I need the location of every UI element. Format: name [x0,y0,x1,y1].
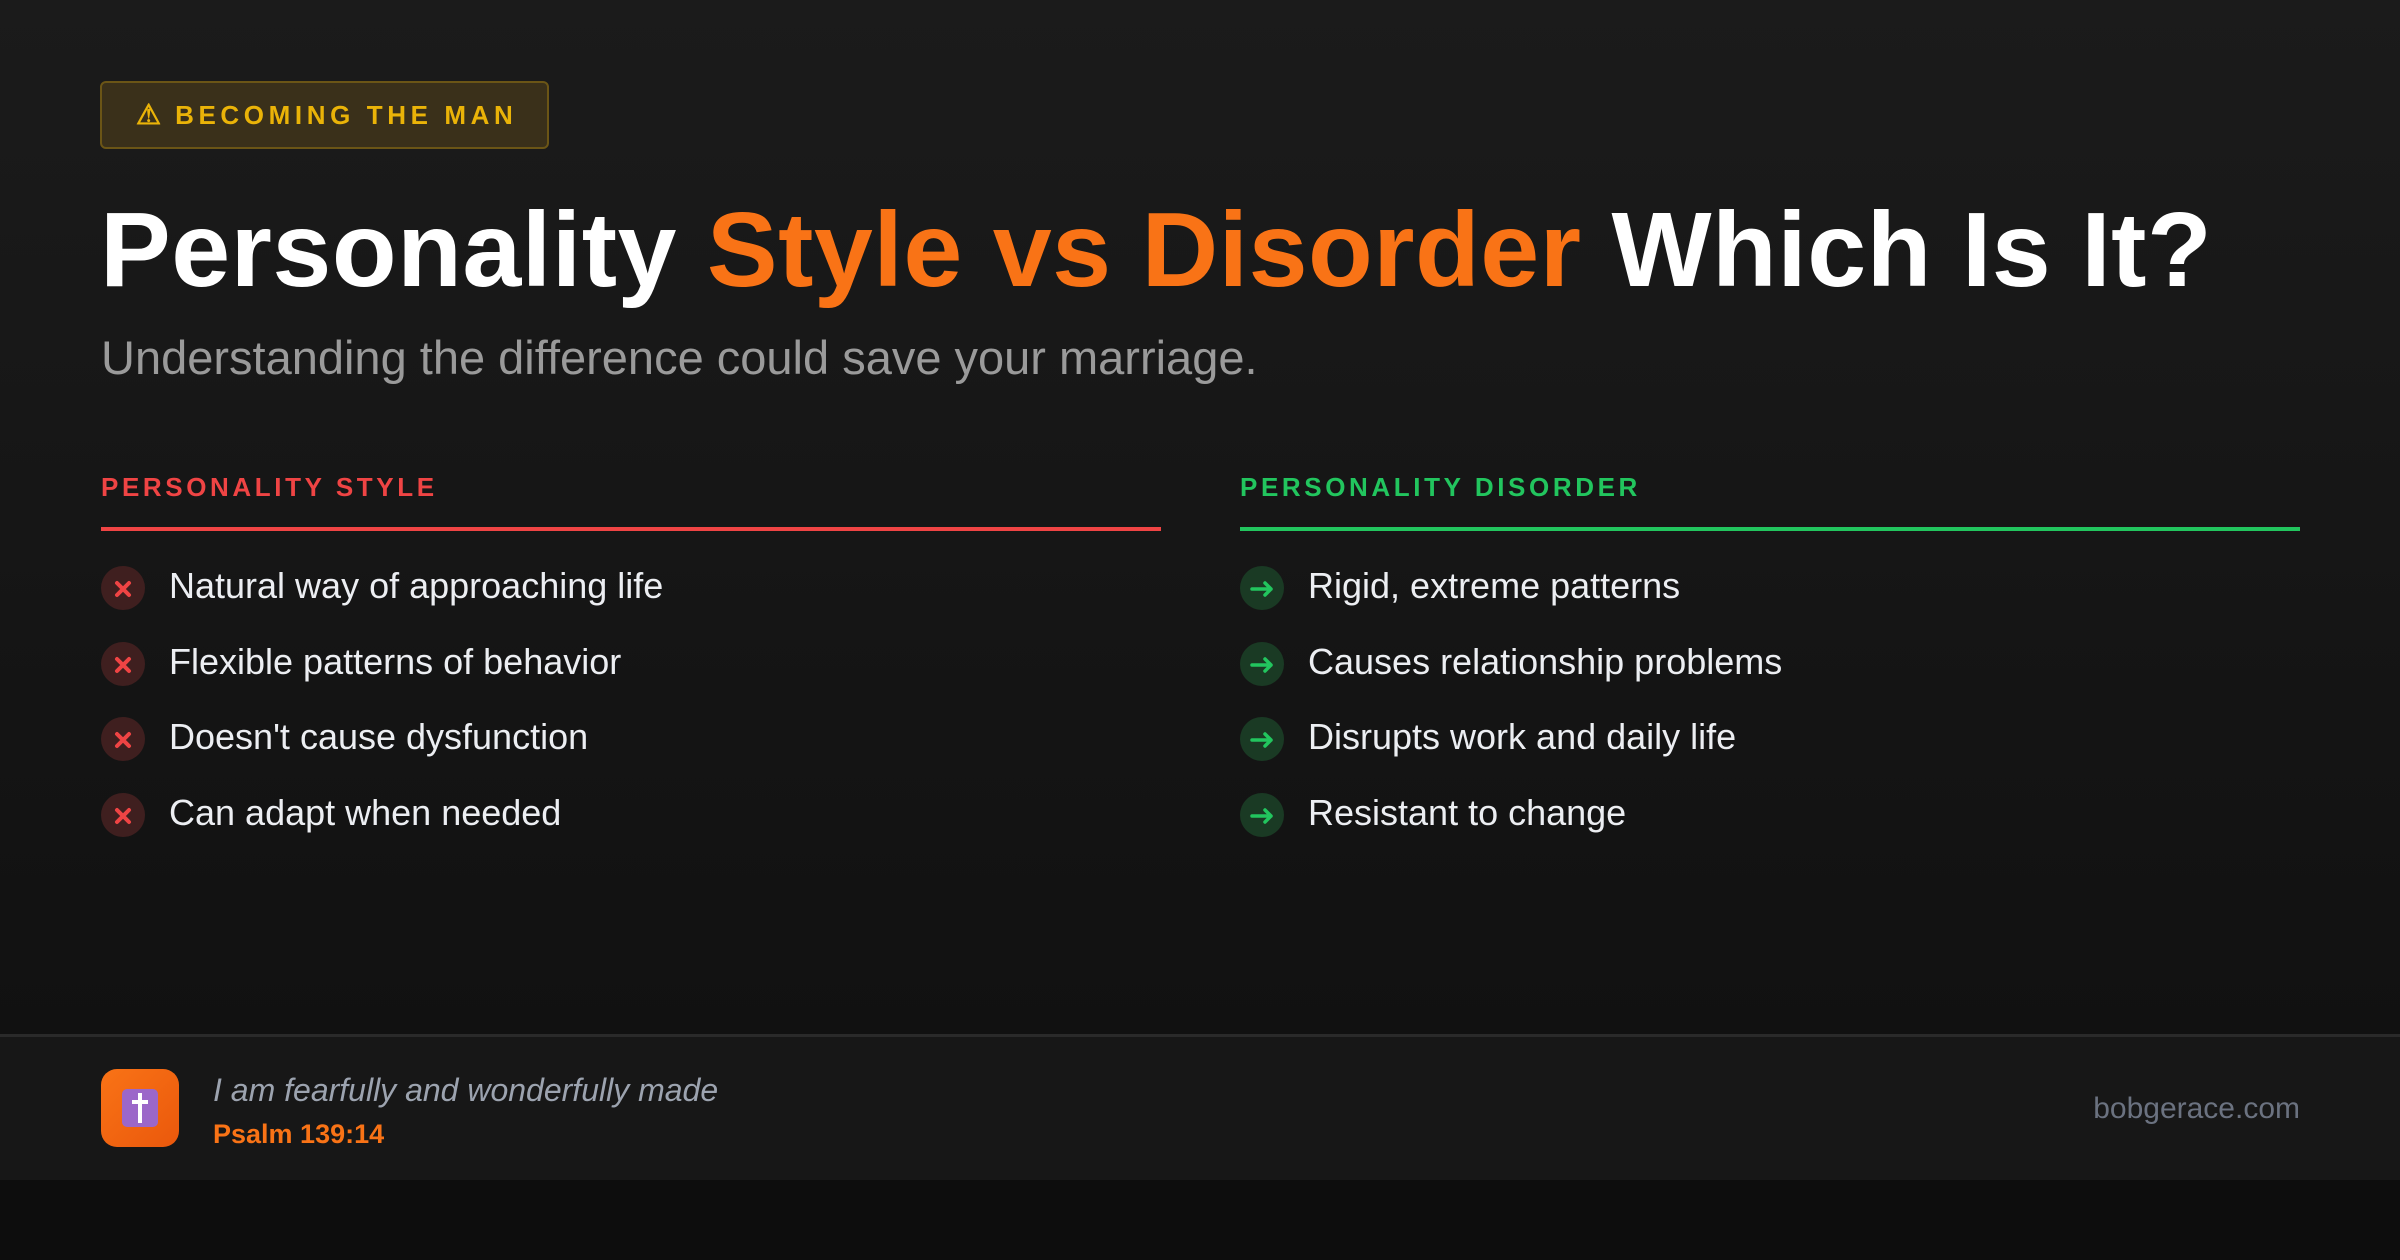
panel: personality style [101,472,1161,837]
item 4: Resistant to change [1308,792,1626,833]
website: bobgerace.com [2093,1092,2300,1125]
badge [100,81,549,149]
item 3: Doesn't cause dysfunction [169,716,588,757]
item 1: Natural way of approaching life [169,565,663,606]
subtitle: Understanding the difference could save your marriage. [101,331,1258,384]
item 4: Can adapt when needed [169,792,561,833]
quote: I am fearfully and wonderfully made [213,1072,718,1108]
citation: Psalm 139:14 [213,1119,384,1149]
badge: ⚠ BECOMING THE MAN [136,99,517,130]
heading: personality disorder: PERSONALITY DISORDER [1240,472,1641,502]
title: Personality Style vs Disorder Which Is It? [100,191,2212,309]
item 2: Flexible patterns of behavior [169,641,621,682]
item 3: Disrupts work and daily life [1308,716,1736,757]
panel: personality disorder [1240,472,2300,837]
footer [0,1034,2400,1180]
item 2: Causes relationship problems [1308,641,1782,682]
item 1: Rigid, extreme patterns [1308,565,1680,606]
heading: personality style: PERSONALITY STYLE [101,472,438,502]
icon: cross [101,1069,179,1147]
